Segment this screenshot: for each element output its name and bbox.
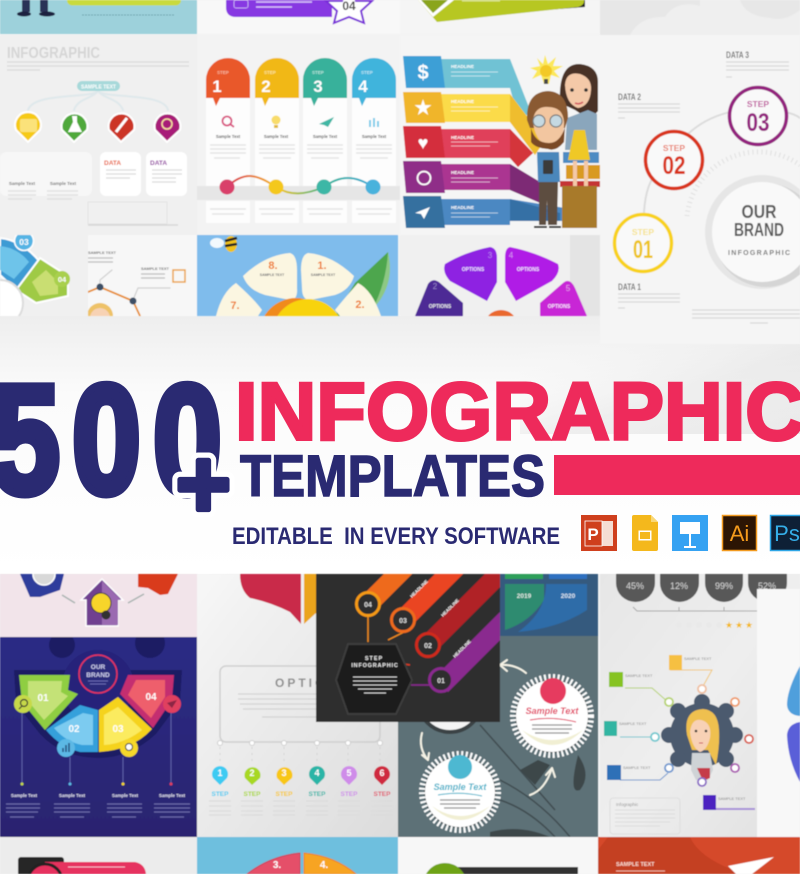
sample text labels: Sample Text: [11, 793, 38, 798]
timeline curve: [227, 176, 373, 193]
pin 2: [244, 767, 261, 798]
panel: four step columns template: [198, 57, 400, 236]
percentage tabs: 99%: [715, 581, 733, 591]
strip labels: HEADLINE: [440, 598, 460, 618]
pin 6: STEP: [374, 791, 391, 798]
milestone text: SAMPLE TEXT: [141, 266, 170, 271]
black tab: [18, 857, 64, 874]
step 02 ring: [646, 132, 702, 188]
icon: keynote: [672, 515, 708, 551]
pill label: SAMPLE TEXT: [81, 84, 116, 90]
data labels: DATA 2: [618, 92, 641, 102]
title: 500+: +: [176, 431, 231, 538]
dark gears: [49, 628, 165, 722]
red accent bar: [554, 455, 800, 495]
badge 03: 03: [19, 237, 29, 247]
green bar: 2019: [517, 593, 532, 600]
panel: gear portrait template: SAMPLE TEXT: [619, 721, 647, 726]
blue segment: [0, 238, 40, 290]
pin: yellow: [15, 112, 41, 142]
icons in badges: [19, 700, 177, 752]
hexagon: INFOGRAPHIC: [351, 663, 399, 669]
red-orange strip: [403, 563, 460, 620]
subtitle: EDITABLE IN EVERY SOFTWARE: [232, 523, 560, 550]
pin: red: [108, 113, 135, 142]
sample circle: blue: Sample Text: [434, 782, 487, 792]
step 2 head: [255, 58, 299, 106]
petal 7: 7.: [230, 300, 240, 312]
pie slice 4: 4.: [320, 860, 328, 871]
step 4 head: STEP: [361, 70, 373, 75]
segment 01: [19, 675, 78, 730]
clouds: [630, 0, 800, 35]
brand emblem: OUR: [91, 664, 106, 671]
panel: bottom pink tab template: [0, 836, 198, 874]
petal 8: 8.: [268, 260, 278, 272]
icon: character feet: [17, 0, 55, 16]
ribbon row: yellow: [403, 92, 545, 155]
panel: six options template: [196, 573, 398, 838]
brand circle: OUR: [742, 202, 776, 222]
step 4 head: [352, 58, 396, 106]
star rating: ★: [725, 620, 733, 630]
character: man: [527, 91, 568, 228]
option 4: OPTIONS: [517, 267, 540, 273]
data labels: DATA 3: [726, 50, 749, 60]
step 1 head: 1: [212, 77, 222, 96]
percentage tabs: 45%: [626, 581, 644, 591]
sample text labels: Sample Text: [216, 134, 241, 139]
pin 2: STEP: [244, 791, 261, 798]
column icons: [222, 116, 378, 128]
line chart: [88, 287, 140, 316]
step 01 ring: [614, 214, 672, 272]
template heading: SAMPLE TEXT: [616, 862, 655, 868]
panel: top cloud template: [600, 0, 800, 34]
brand circle: INFOGRAPHIC: [728, 250, 790, 257]
percentage tabs: 52%: [758, 581, 776, 591]
strip labels: HEADLINE: [452, 639, 472, 659]
ribbon row: blue: [403, 196, 595, 228]
petal 1: 1.: [317, 260, 327, 272]
note box: Infographic: [616, 802, 639, 807]
ring 04: [356, 592, 380, 616]
brand circle: [705, 175, 800, 289]
option heading: OPTION: [275, 676, 339, 690]
pie slice 3: [247, 853, 300, 874]
icon: bee: [210, 236, 237, 252]
lower template collage: [0, 562, 800, 874]
flower centre: [259, 298, 344, 372]
option 3: 3: [488, 251, 493, 260]
panel: milestone line template: [88, 236, 198, 317]
crimson strip: [428, 573, 500, 645]
pin 1: STEP: [212, 791, 229, 798]
panel: top purple banner template: [196, 0, 375, 33]
ribbon row: red: [403, 126, 533, 167]
petal 2: 2.: [355, 299, 365, 311]
strip labels: [409, 579, 472, 659]
badge 04: 04: [58, 275, 67, 284]
petal 2: [335, 283, 381, 316]
brand emblem: [79, 655, 117, 693]
pin 5: STEP: [341, 791, 358, 798]
sample text labels: Sample Text: [59, 793, 86, 798]
node connectors: [620, 670, 755, 809]
yellow banner: [67, 0, 181, 6]
step 01 ring: 01: [633, 236, 653, 264]
connecting arc: [644, 112, 800, 212]
segment 03: 03: [112, 724, 124, 735]
panel: ribbon list with characters template: [402, 55, 601, 228]
step 02 ring: STEP: [663, 143, 685, 153]
pin: green: [62, 113, 88, 142]
panel: bottom blue pie template: [196, 836, 398, 874]
brand emblem: BRAND: [86, 672, 110, 679]
panel: our brand steps template: [599, 50, 800, 324]
sample text labels: Sample Text: [159, 793, 186, 798]
column cards: [206, 98, 396, 223]
purple strip: [441, 616, 510, 685]
panel: white title band: [0, 345, 800, 574]
sample text labels: [9, 181, 77, 186]
sample text labels: [216, 134, 387, 139]
green ribbon: [418, 0, 584, 22]
character: woman: [560, 64, 598, 189]
node rings: [651, 685, 753, 786]
milestone text: SAMPLE TEXT: [88, 250, 117, 255]
green leaf: [335, 252, 390, 316]
pin 6: 6: [379, 768, 385, 778]
panel: chart corner template: [499, 573, 599, 637]
percentage tabs: [616, 574, 787, 602]
option 4: 4: [509, 251, 514, 260]
petal 8: [243, 253, 297, 300]
panel: dark diagonal steps template: [315, 573, 501, 723]
strip labels: HEADLINE: [409, 579, 429, 599]
green circle: [423, 863, 467, 874]
step 3 head: [303, 58, 347, 106]
segment 03: [99, 697, 152, 752]
pin 3: [276, 767, 293, 798]
step 3 head: STEP: [312, 70, 324, 75]
panel: navy gear template: [0, 636, 198, 838]
step 4 head: 4: [358, 77, 368, 96]
ribbon row: purple: [403, 161, 545, 205]
ring 01: [430, 668, 452, 692]
pink strip: [45, 862, 146, 874]
sample text labels: Sample Text: [50, 181, 77, 186]
option 5: OPTIONS: [548, 304, 571, 310]
panel: slate floral template: [397, 636, 599, 838]
option 3: [444, 247, 497, 301]
dark bar: [458, 867, 578, 874]
icon: light bulb: [530, 55, 563, 84]
white overlay panel: [757, 589, 800, 837]
segment 01: 01: [37, 693, 49, 704]
data labels: DATA: [104, 160, 121, 167]
segment halo: [14, 670, 182, 758]
hidden sample circle: [418, 668, 482, 732]
pin 1: 1: [217, 768, 223, 778]
star badge 04: [326, 0, 372, 23]
ribbon row: yellow: ★: [414, 98, 432, 119]
step 2 head: STEP: [264, 70, 276, 75]
sample text labels: Sample Text: [112, 793, 139, 798]
sample text labels: Sample Text: [362, 134, 387, 139]
dark plant shapes: [480, 725, 570, 837]
frame nodes: [218, 740, 382, 746]
template heading: INFOGRAPHIC: [7, 45, 100, 62]
panel: bottom green template: [398, 836, 599, 874]
segment 04: [120, 675, 174, 728]
panel: gear portrait template: SAMPLE TEXT: [623, 765, 651, 770]
character face: [87, 303, 113, 329]
sample circle: red: Sample Text: [526, 706, 579, 716]
centre ball: [484, 310, 518, 344]
flow arrows: [421, 660, 555, 795]
ribbon row: yellow: HEADLINE: [451, 99, 474, 104]
ring 02: 02: [424, 643, 432, 650]
pin 4: STEP: [309, 791, 326, 798]
petal 1: SAMPLE TEXT: [311, 273, 336, 277]
pin 3: STEP: [276, 791, 293, 798]
pin 6: [374, 766, 391, 798]
petal 8: SAMPLE TEXT: [260, 273, 285, 277]
sample text labels: Sample Text: [264, 134, 289, 139]
star rating: ★: [745, 620, 753, 630]
data labels: [618, 50, 749, 292]
panel: gear portrait template: [599, 573, 800, 838]
ribbon detail lines: [451, 72, 498, 217]
green segment: [16, 258, 68, 303]
cards: [0, 152, 187, 196]
option 2: OPTIONS: [429, 304, 452, 310]
panel: gauge segments fragment: [0, 234, 89, 316]
ribbon row: blue-teal: HEADLINE: [451, 64, 474, 69]
data labels: [104, 160, 167, 167]
title: infographic: INFOGRAPHIC: [235, 366, 800, 458]
icon: paper plane: [728, 857, 774, 874]
sample circle: blue: [422, 754, 498, 830]
panel: options petals template: [414, 235, 600, 317]
pie slice 4: [304, 853, 356, 874]
pin 2: 2: [249, 768, 255, 778]
sample text labels: [11, 793, 186, 798]
ribbon row: blue: HEADLINE: [451, 205, 474, 210]
pin 4: 4: [314, 768, 320, 778]
pin 1: [212, 766, 229, 798]
sample text labels: Sample Text: [313, 134, 338, 139]
step 3 head: 3: [313, 77, 323, 96]
segment 02: 02: [68, 724, 80, 735]
connector tree: [28, 91, 168, 110]
panel: infographic pins template: [6, 45, 190, 236]
panel: pink house template: [0, 573, 197, 638]
step 1 head: STEP: [217, 70, 229, 75]
hexagon: [336, 644, 412, 714]
milestone points: [96, 284, 136, 304]
pin 4: [309, 766, 326, 798]
step 01 ring: STEP: [632, 227, 654, 237]
gear: [661, 694, 743, 776]
connector lines: [368, 616, 408, 642]
panel: top teal template: [0, 0, 198, 34]
character: blonde woman: [686, 709, 719, 781]
blue tag: [20, 574, 64, 597]
title: 500+: +: [176, 431, 231, 538]
red tag: [138, 574, 178, 595]
icon: illustrator: [722, 516, 756, 550]
gear: [0, 280, 23, 326]
link lines: [62, 594, 144, 603]
gray corner glow: [520, 344, 800, 434]
node labels: [604, 655, 716, 810]
sample circle: red: [513, 677, 591, 755]
option 5: [540, 281, 587, 316]
option 3: OPTIONS: [462, 267, 485, 273]
star rating: [676, 620, 753, 630]
segment 02: [46, 705, 98, 752]
step 03 ring: STEP: [747, 99, 769, 109]
petal 1: [301, 253, 354, 300]
orange shape: [304, 574, 316, 624]
title: templates: TEMPLATES: [240, 444, 545, 509]
step 2 head: 2: [261, 77, 271, 96]
timeline nodes: [220, 180, 380, 194]
darker blob: [598, 837, 745, 874]
rounded frame: [220, 666, 380, 742]
ring 01: 01: [437, 678, 445, 685]
icon: powerpoint: [581, 515, 617, 551]
percentage tabs: 12%: [670, 581, 688, 591]
icon: orange gift: [173, 270, 185, 282]
red shape: [240, 574, 301, 624]
ring: [28, 864, 62, 874]
ribbon row: red: HEADLINE: [451, 135, 474, 140]
dial tick marks: [687, 152, 800, 216]
brand circle: BRAND: [734, 220, 784, 240]
icon: google slides: [632, 515, 658, 551]
note box: [610, 798, 680, 834]
step 02 ring: 02: [662, 152, 686, 180]
line dots: [20, 782, 172, 786]
ribbon row: purple: HEADLINE: [451, 170, 474, 175]
option 4: [505, 247, 559, 301]
ring 03: 03: [399, 618, 407, 625]
pin 5: 5: [346, 768, 352, 778]
purple banner: [226, 0, 332, 17]
icon: purple house with bulb: [81, 579, 123, 626]
option 5: 5: [566, 284, 571, 293]
petal 7: [216, 283, 262, 316]
suitcase: [562, 186, 597, 228]
segment badges: [14, 695, 181, 757]
orange strip: [368, 562, 410, 604]
pin 5: [341, 766, 358, 798]
milestone text: [88, 250, 170, 271]
blue bar: 2020: [561, 593, 576, 600]
ribbon row: blue-teal: $: [417, 62, 429, 84]
panel: gear portrait template: SAMPLE TEXT: [718, 796, 746, 801]
panel: bottom orange paper plane template: [597, 836, 800, 874]
ring 03: [392, 608, 414, 632]
sample text labels: Sample Text: [9, 181, 36, 186]
data labels: DATA: [150, 160, 167, 167]
pin 3: 3: [281, 768, 287, 778]
ribbon row: red: ♥: [418, 133, 428, 153]
icon: photoshop: Ps: [774, 521, 800, 546]
option 2: 2: [433, 282, 438, 291]
hexagon: STEP: [365, 656, 383, 662]
panel: gear portrait template: SAMPLE TEXT: [625, 673, 653, 678]
option 2: [415, 280, 463, 316]
panel: gear portrait template: SAMPLE TEXT: [684, 656, 712, 661]
step 1 head: [206, 58, 250, 106]
step 03 ring: [730, 88, 786, 144]
star rating: ★: [735, 620, 743, 630]
data labels: DATA 1: [618, 282, 641, 292]
panel: flower infographic template: [196, 234, 399, 317]
upper template collage: [0, 0, 800, 372]
icon: photoshop: [770, 516, 800, 550]
pill label: [77, 81, 120, 91]
icon: powerpoint: P: [587, 525, 599, 544]
drop lines: [22, 713, 171, 784]
segment 04: 04: [145, 692, 157, 703]
pin: magenta: [155, 113, 180, 142]
ribbon row: blue-teal: [403, 56, 530, 125]
icon: illustrator: Ai: [730, 521, 749, 546]
panel: top green ribbon template: [420, 0, 586, 22]
pie slice 3: 3.: [273, 860, 281, 871]
ring 02: [416, 634, 440, 656]
book stack: [560, 152, 600, 187]
ring 04: 04: [364, 602, 372, 609]
step 03 ring: 03: [746, 109, 770, 137]
